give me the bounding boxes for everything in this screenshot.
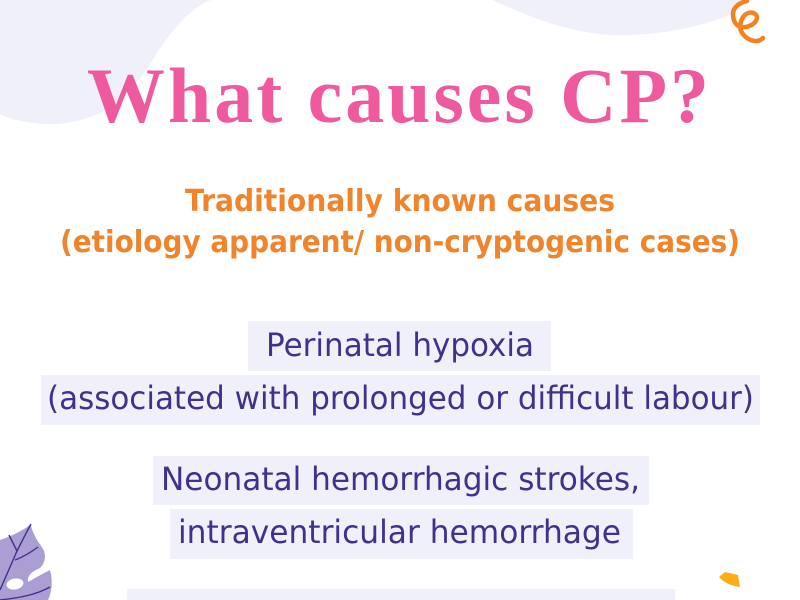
cause: perinatal hypoxia: Perinatal hypoxia (266, 326, 534, 364)
subtitle: Traditionally known causes (185, 184, 615, 219)
cause: neonatal hemorrhagic strokes: intraventricular hemorrhage (178, 513, 621, 551)
cause: perinatal hypoxia: (associated with prolonged or difficult labour) (47, 379, 754, 417)
cause: perinatal hypoxia (41, 321, 760, 425)
background blob: top right (492, 0, 748, 35)
cause box: cropped at page edge (127, 589, 675, 600)
cause: neonatal hemorrhagic strokes (153, 456, 649, 559)
icon: purple leaf (0, 524, 52, 600)
subtitle: (etiology apparent/ non-cryptogenic cases) (60, 225, 740, 260)
title: What causes CP? (87, 52, 712, 139)
background blob: top left (0, 0, 211, 124)
subtitle (60, 184, 740, 260)
icon: yellow petal (719, 572, 740, 587)
icon: orange squiggle (733, 1, 763, 41)
cause: neonatal hemorrhagic strokes: Neonatal hemorrhagic strokes, (161, 460, 640, 498)
